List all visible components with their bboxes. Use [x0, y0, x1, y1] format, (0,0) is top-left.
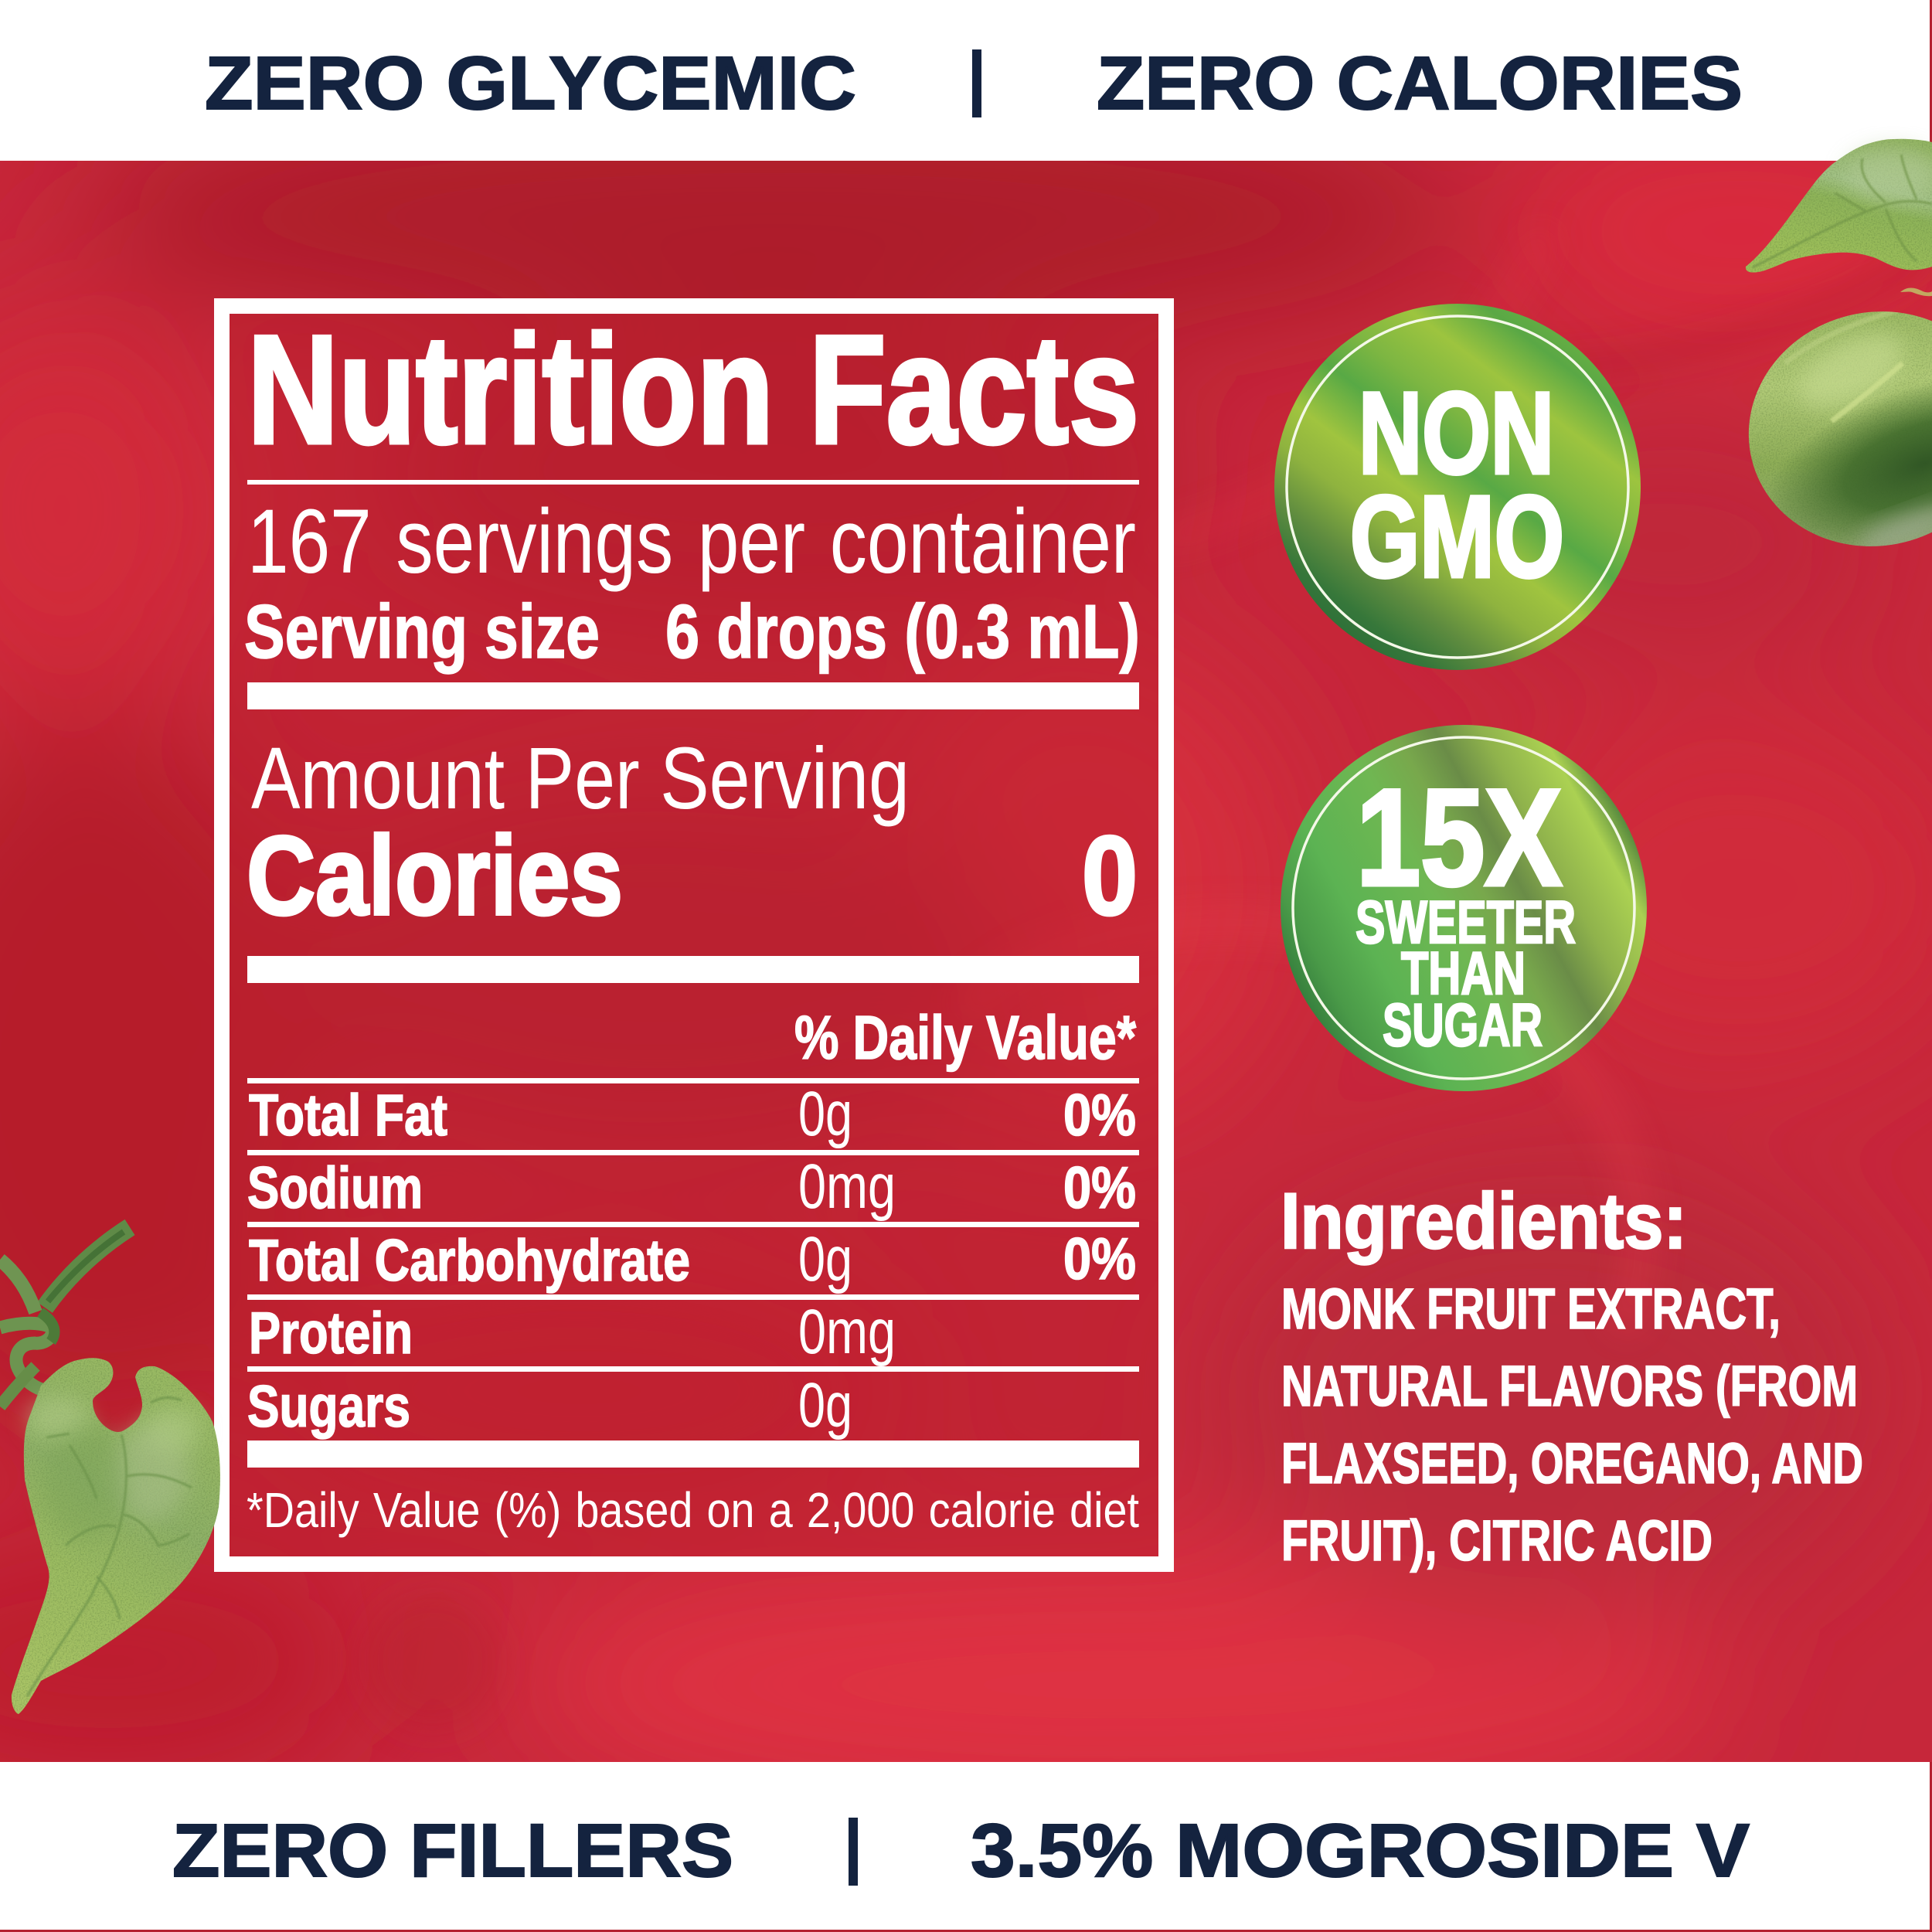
bottom banner — [0, 1762, 1932, 1932]
heading: mogroside: 3.5% MOGROSIDE V — [971, 1808, 1750, 1893]
banner separator — [849, 1818, 858, 1886]
icon: top right leaf — [1746, 139, 1932, 273]
calories row — [247, 813, 1138, 938]
badge: non gmo — [1274, 304, 1641, 670]
row: sodium: Sodium — [247, 1155, 423, 1221]
icon: monk fruit — [1748, 311, 1932, 546]
badge: 15x sweeter than sugar: THAN — [1401, 939, 1526, 1007]
top banner — [205, 0, 1932, 161]
row: sodium: 0% — [1063, 1155, 1136, 1221]
badge: 15x sweeter than sugar — [1281, 725, 1647, 1091]
servings per container: 167 servings per container — [247, 491, 1136, 593]
badge: 15x sweeter than sugar: 15X — [1356, 760, 1562, 914]
row: protein: Protein — [249, 1301, 413, 1366]
row: total fat: 0% — [1063, 1083, 1136, 1148]
footnote: *Daily Value (%) based on a 2,000 calorie diet — [247, 1482, 1139, 1538]
badge: 15x sweeter than sugar: SUGAR — [1383, 991, 1543, 1059]
row: total fat: Total Fat — [249, 1083, 447, 1148]
row: total carbohydrate: 0g — [798, 1224, 852, 1294]
serving size: 6 drops (0.3 mL) — [665, 589, 1140, 674]
badge: 15x sweeter than sugar: SWEETER — [1355, 888, 1576, 956]
row: total carbohydrate — [249, 1224, 1136, 1294]
badge: non gmo: NON — [1359, 368, 1554, 498]
daily value header: % Daily Value* — [794, 1003, 1137, 1072]
panel: nutrition facts — [222, 304, 1166, 1564]
ingredients list — [1281, 1277, 1863, 1573]
row: sodium — [247, 1151, 1136, 1222]
banner separator — [972, 49, 981, 117]
row: sodium: 0mg — [798, 1151, 896, 1222]
ingredients list: FRUIT), CITRIC ACID — [1281, 1509, 1713, 1573]
nutrition title: Nutrition Facts — [247, 304, 1139, 476]
ingredients heading: Ingredients: — [1281, 1177, 1687, 1265]
amount per serving: Amount Per Serving — [251, 730, 910, 827]
calories row: Calories — [247, 813, 623, 938]
heading: zero fillers: ZERO FILLERS — [172, 1808, 733, 1893]
row: total carbohydrate: Total Carbohydrate — [249, 1228, 690, 1294]
ingredients — [1281, 1177, 1863, 1573]
row: protein — [249, 1297, 896, 1367]
icon: tendril — [1900, 287, 1932, 296]
badge: non gmo: GMO — [1350, 471, 1564, 601]
row: sugars: Sugars — [247, 1374, 410, 1440]
calories row: 0 — [1082, 813, 1138, 938]
row: protein: 0mg — [798, 1297, 896, 1367]
row: sugars — [247, 1370, 852, 1440]
row: sugars: 0g — [798, 1370, 852, 1440]
heading: zero glycemic: ZERO GLYCEMIC — [205, 41, 856, 125]
serving size — [244, 589, 1140, 674]
serving size: Serving size — [244, 589, 600, 674]
icon: heart-shaped leaf — [12, 1358, 220, 1714]
icon: vine tendrils — [0, 1227, 130, 1406]
ingredients list: MONK FRUIT EXTRACT, — [1281, 1277, 1781, 1341]
row: total fat: 0g — [798, 1079, 852, 1149]
row: total carbohydrate: 0% — [1063, 1226, 1136, 1292]
row: total fat — [249, 1079, 1136, 1149]
heading: zero calories: ZERO CALORIES — [1097, 41, 1743, 125]
